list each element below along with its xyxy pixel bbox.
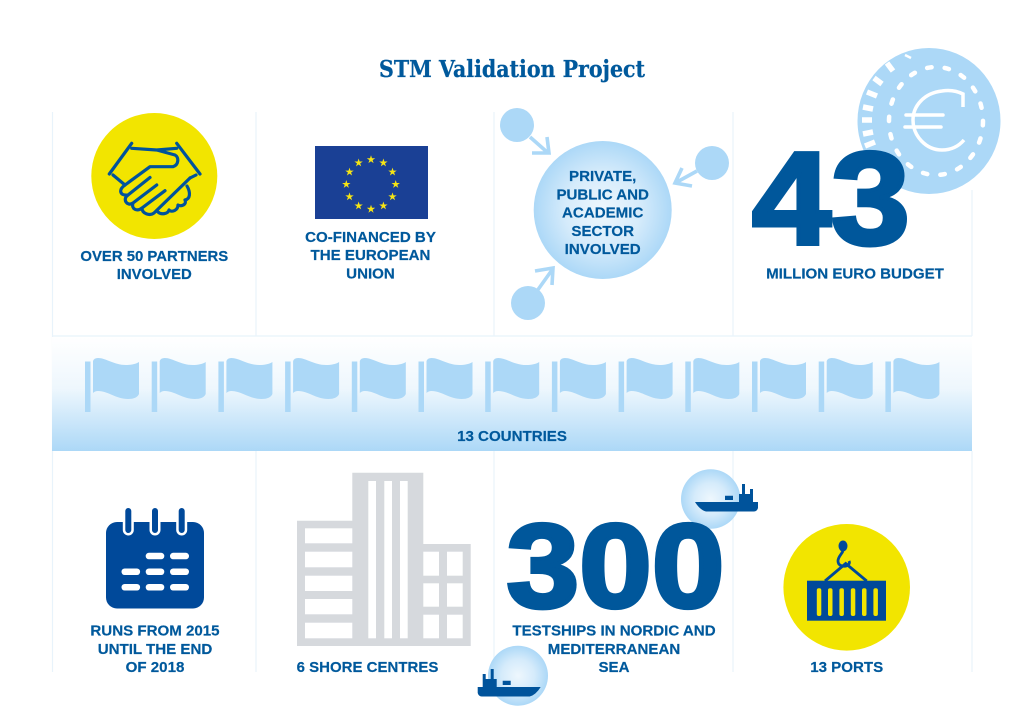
icon: ship top — [695, 484, 758, 512]
label: EU funding: UNION — [346, 265, 395, 282]
circle: ship badge bottom — [488, 646, 548, 706]
icon row: flags — [85, 358, 939, 412]
panel: budget — [752, 48, 1000, 283]
icon: buildings — [297, 473, 471, 646]
number: 300: 300 — [506, 500, 724, 633]
number: 43: 43 — [752, 125, 910, 272]
label: partners: INVOLVED — [117, 267, 192, 283]
icon: ship bottom — [478, 669, 541, 696]
panel: ports — [783, 524, 910, 676]
label: sectors: SECTOR — [571, 223, 634, 240]
label: duration: RUNS FROM 2015 — [90, 623, 220, 640]
label: budget: MILLION EURO BUDGET — [766, 266, 945, 283]
panel: countries band — [52, 337, 972, 451]
panel: partners — [80, 113, 228, 283]
title: STM Validation Project — [379, 56, 645, 83]
label: ports: 13 PORTS — [810, 659, 883, 676]
panel: EU funding — [305, 146, 436, 282]
icon: EU flag — [315, 146, 428, 219]
icon: container — [783, 524, 910, 651]
label: sectors: PUBLIC AND — [556, 186, 649, 203]
band background — [52, 337, 972, 451]
label: sectors: INVOLVED — [565, 241, 641, 258]
icon: sector arrows — [500, 108, 729, 320]
icon: euro coin — [858, 48, 1000, 194]
panel: sectors — [500, 108, 729, 320]
label: sectors: ACADEMIC — [562, 205, 643, 222]
label: testships: MEDITERRANEAN — [548, 641, 680, 658]
label: EU funding: THE EUROPEAN — [311, 247, 430, 264]
label: duration: OF 2018 — [126, 659, 184, 676]
label: testships: TESTSHIPS IN NORDIC AND — [512, 623, 716, 640]
panel: shore centres — [297, 473, 471, 676]
label: partners: OVER 50 PARTNERS — [80, 249, 228, 265]
label: countries: 13 COUNTRIES — [457, 428, 567, 445]
icon: handshake — [91, 113, 217, 239]
icon: calendar — [106, 511, 204, 608]
circle: ship badge top — [681, 469, 740, 529]
label: duration: UNTIL THE END — [98, 641, 212, 658]
label: shore centres: 6 SHORE CENTRES — [297, 659, 438, 676]
circle: sector badge — [534, 141, 672, 279]
panel: duration — [90, 511, 220, 676]
label: sectors: PRIVATE, — [569, 168, 636, 185]
label: EU funding: CO-FINANCED BY — [305, 229, 436, 246]
panel: testships — [478, 469, 758, 706]
label: testships: SEA — [598, 659, 630, 676]
